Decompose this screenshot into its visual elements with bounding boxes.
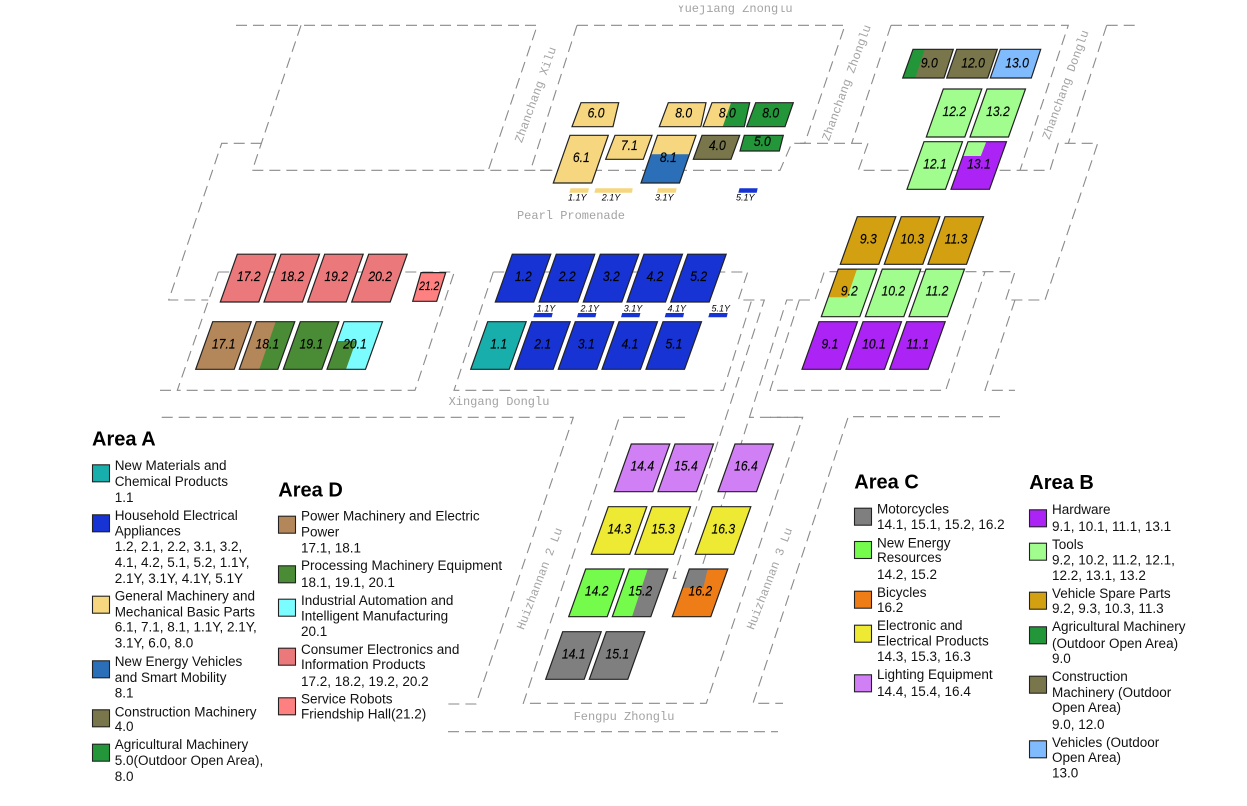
- hall 6.0: [572, 103, 619, 127]
- hall 16.2: [672, 569, 728, 617]
- legend item: Electronic and Electrical Products: 14.3, 15.3, 16.3: [877, 649, 971, 664]
- road label: Zhanchang Xilu: Zhanchang Xilu: [512, 45, 560, 145]
- hall 16.2: 16.2: [688, 583, 712, 599]
- legend item: Electronic and Electrical Products: Electronic and: [877, 618, 963, 633]
- strip 1.1Y: 1.1Y: [537, 304, 556, 314]
- hall 14.1: 14.1: [562, 646, 586, 661]
- hall 20.1: [327, 322, 382, 369]
- hall 14.3: [591, 507, 647, 554]
- legend item: Household Electrical Appliances: 1.2, 2.1, 2.2, 3.1, 3.2,: [115, 539, 242, 554]
- legend item: New Materials: [92, 458, 228, 505]
- hall 20.2: [352, 254, 407, 302]
- legend item: Vehicles outdoor: Open Area): [1052, 750, 1121, 765]
- hall 14.1: [546, 632, 601, 679]
- legend item: Consumer Electronics: Consumer Electronics and: [301, 642, 459, 657]
- hall 14.3: 14.3: [608, 521, 632, 536]
- legend item: New Energy Vehicles: New Energy Vehicles: [115, 654, 243, 669]
- hall 10.1: 10.1: [862, 336, 886, 351]
- strip 5.1Y: [708, 304, 731, 317]
- legend item: Power Machinery: 17.1, 18.1: [301, 540, 361, 555]
- hall 1.2: 1.2: [515, 268, 532, 284]
- hall 5.0: [740, 133, 783, 151]
- hall 2.1: 2.1: [533, 336, 551, 351]
- hall 5.1: [646, 322, 702, 369]
- strip 2.1Y top: 2.1Y: [601, 193, 621, 203]
- strip 3.1Y: [621, 304, 643, 317]
- legend item: Lighting Equipment: 14.4, 15.4, 16.4: [877, 684, 971, 699]
- hall 8.1: 8.1: [660, 149, 677, 165]
- hall 5.2: 5.2: [690, 268, 707, 284]
- hall 15.3: 15.3: [651, 521, 676, 536]
- hall 19.2: 19.2: [324, 268, 348, 284]
- hall 9.0: [903, 49, 953, 78]
- legend item: New Energy Resources: 14.2, 15.2: [877, 567, 937, 582]
- legend item: Household Electrical Appliances: [92, 508, 250, 586]
- legend item: Motorcycles: Motorcycles: [877, 501, 949, 516]
- legend item: Motorcycles: 14.1, 15.1, 15.2, 16.2: [877, 517, 1005, 532]
- legend item: General Machinery: [92, 589, 257, 651]
- strip 5.1Y: 5.1Y: [711, 304, 731, 314]
- legend item: Lighting Equipment: Lighting Equipment: [877, 667, 993, 682]
- strip 1.1Y: [533, 304, 556, 317]
- heading: Area B: Area B: [1029, 472, 1094, 494]
- legend item: General Machinery: General Machinery and: [115, 589, 255, 604]
- hall 19.2: [308, 254, 363, 302]
- legend item: Vehicle Spare Parts: Vehicle Spare Parts: [1052, 586, 1171, 601]
- legend item: Electronic and Electrical Products: Electrical Products: [877, 634, 989, 649]
- legend item: New Energy Vehicles: [92, 654, 243, 701]
- hall 8.0 general machinery: [659, 103, 706, 127]
- legend item: Construction Machinery: 4.0: [115, 719, 133, 734]
- legend item: New Energy Vehicles: 8.1: [115, 686, 133, 701]
- legend item: Agricultural Machinery: 5.0(Outdoor Open Area),: [115, 753, 263, 768]
- hall 20.2: 20.2: [367, 268, 392, 284]
- legend item: Power Machinery: Power: [301, 525, 340, 540]
- hall 8.0 mixed: 8.0: [719, 105, 737, 121]
- hall 19.1: [283, 322, 339, 369]
- hall 15.2: 15.2: [628, 583, 652, 599]
- hall 15.2: [612, 569, 668, 617]
- legend item: New Materials: Chemical Products: [115, 474, 228, 489]
- strip 2.1Y top: [594, 188, 633, 203]
- hall 4.2: 4.2: [647, 268, 663, 284]
- hall 3.2: [583, 254, 639, 302]
- hall 9.0: 9.0: [921, 55, 939, 70]
- hall 9.2: 9.2: [841, 283, 858, 299]
- hall 19.1: 19.1: [299, 336, 323, 351]
- road label: Pearl Promenade: Pearl Promenade: [517, 209, 625, 223]
- hall 6.1: [553, 135, 608, 183]
- legend item: Service Robots: Service Robots: [301, 692, 393, 707]
- legend item: Power Machinery: Power Machinery and Electric: [301, 509, 480, 524]
- legend item: Industrial Automation: [278, 593, 453, 639]
- road label: Huizhannan 3 Lu: Huizhannan 3 Lu: [744, 526, 796, 632]
- legend item: Household Electrical Appliances: 4.1, 4.2, 5.1, 5.2, 1.1Y,: [115, 555, 250, 570]
- hall 11.2: 11.2: [926, 283, 948, 299]
- hall 10.1: [846, 322, 902, 369]
- hall 15.3: [635, 507, 690, 554]
- hall 6.0: 6.0: [588, 105, 605, 121]
- hall 16.4: 16.4: [734, 458, 758, 474]
- legend item: Construction Machinery outdoor: 9.0, 12.0: [1052, 717, 1105, 732]
- hall 1.1: [471, 322, 526, 369]
- legend item: New Energy Resources: New Energy: [877, 535, 951, 550]
- legend item: Industrial Automation: 20.1: [301, 624, 327, 639]
- legend item: Construction Machinery: [92, 704, 257, 734]
- road label: Xingang Donglu: Xingang Donglu: [449, 395, 549, 409]
- legend item: Consumer Electronics: [278, 642, 459, 689]
- legend item: Industrial Automation: Intelligent Manufacturing: [301, 608, 448, 623]
- road label: Fengpu Zhonglu: Fengpu Zhonglu: [574, 710, 674, 724]
- legend: Area A: [92, 429, 263, 784]
- hall 12.0: 12.0: [961, 55, 986, 70]
- hall 4.2: [627, 254, 682, 302]
- hall 3.2: 3.2: [603, 268, 620, 284]
- strip 4.1Y: [665, 304, 687, 317]
- legend item: Construction Machinery outdoor: Construction: [1052, 669, 1128, 684]
- legend item: New Materials: New Materials and: [115, 458, 226, 473]
- hall 15.1: [589, 632, 645, 679]
- strip 3.1Y: 3.1Y: [624, 304, 643, 314]
- legend item: Electronic and Electrical Products: [854, 618, 989, 664]
- strip 5.1Y top: 5.1Y: [736, 193, 756, 203]
- legend item: Hardware: [1030, 502, 1171, 534]
- legend item: Construction Machinery outdoor: [1030, 669, 1172, 732]
- hall 4.0: [693, 135, 740, 159]
- legend item: Vehicle Spare Parts: [1030, 586, 1171, 616]
- strip 1.1Y top: [568, 188, 589, 203]
- hall 18.2: 18.2: [281, 268, 304, 284]
- legend item: Industrial Automation: Industrial Automation and: [301, 593, 453, 608]
- legend item: New Materials: 1.1: [115, 490, 133, 505]
- hall 8.1: [641, 135, 696, 183]
- hall 16.3: [695, 507, 751, 554]
- legend item: Agricultural Machinery: Agricultural Machinery: [115, 737, 248, 752]
- legend item: Household Electrical Appliances: 2.1Y, 3.1Y, 4.1Y, 5.1Y: [115, 571, 243, 586]
- hall 18.2: [264, 254, 320, 302]
- legend item: Lighting Equipment: [854, 667, 993, 699]
- legend item: General Machinery: 3.1Y, 6.0, 8.0: [115, 636, 193, 651]
- hall 7.1: [606, 135, 652, 159]
- legend item: Vehicle Spare Parts: 9.2, 9.3, 10.3, 11.3: [1052, 601, 1164, 616]
- strip 4.1Y: 4.1Y: [667, 304, 687, 314]
- hall 5.2: [671, 254, 726, 302]
- hall 8.0 general machinery: 8.0: [675, 105, 693, 121]
- legend item: Bicycles: Bicycles: [877, 585, 927, 600]
- legend item: Tools: [1030, 537, 1175, 583]
- legend item: Agricultural Machinery outdoor: Agricultural Machinery: [1052, 619, 1186, 634]
- road label: Zhanchang Zhonglu: Zhanchang Zhonglu: [820, 23, 875, 143]
- legend item: Agricultural Machinery: [92, 737, 263, 784]
- hall 10.2: [865, 269, 921, 317]
- hall 17.2: [220, 254, 276, 302]
- hall 12.0: [947, 49, 997, 78]
- legend item: General Machinery: 6.1, 7.1, 8.1, 1.1Y, 2.1Y,: [115, 620, 257, 635]
- legend item: Motorcycles: [854, 501, 1005, 532]
- strip 5.1Y top: [736, 188, 758, 203]
- hall 5.1: 5.1: [666, 336, 682, 351]
- legend item: Tools: Tools: [1052, 537, 1084, 552]
- hall 7.1: 7.1: [621, 137, 638, 153]
- hall 12.2: [926, 89, 982, 137]
- legend: Area C: [854, 471, 1005, 699]
- legend item: Consumer Electronics: 17.2, 18.2, 19.2, 20.2: [301, 674, 429, 689]
- legend item: Consumer Electronics: Information Products: [301, 657, 426, 672]
- heading: Area D: Area D: [278, 480, 343, 502]
- hall 9.2: [821, 269, 877, 317]
- hall 9.3: [840, 217, 896, 264]
- hall 5.0: 5.0: [754, 133, 772, 149]
- heading: Area C: Area C: [854, 471, 919, 493]
- hall 16.4: [718, 444, 774, 492]
- hall 8.0 agricultural: 8.0: [762, 105, 780, 121]
- hall 18.1: [239, 322, 295, 369]
- legend item: Bicycles: 16.2: [877, 600, 903, 615]
- hall 9.3: 9.3: [860, 231, 878, 246]
- legend item: Processing Machinery: Processing Machinery Equipment: [301, 558, 502, 573]
- legend item: Tools: 12.2, 13.1, 13.2: [1052, 568, 1146, 583]
- legend item: Agricultural Machinery outdoor: 9.0: [1052, 651, 1071, 666]
- hall 18.1: 18.1: [255, 336, 279, 351]
- hall 4.1: [602, 322, 658, 369]
- legend item: Processing Machinery: [278, 558, 502, 590]
- road label: Zhanchang Donglu: Zhanchang Donglu: [1040, 28, 1092, 142]
- legend item: Agricultural Machinery: 8.0: [115, 769, 133, 784]
- hall 14.2: 14.2: [585, 583, 609, 599]
- hall 9.1: [802, 322, 858, 369]
- hall 17.1: 17.1: [212, 336, 236, 351]
- hall 8.0 mixed: [703, 103, 750, 127]
- hall 8.0 agricultural: [747, 103, 793, 127]
- hall 1.2: [495, 254, 551, 302]
- hall 11.1: 11.1: [906, 336, 929, 351]
- hall 15.1: 15.1: [605, 646, 629, 661]
- legend item: New Energy Resources: [854, 535, 951, 582]
- legend item: Hardware: 9.1, 10.1, 11.1, 13.1: [1052, 519, 1171, 534]
- hall 12.1: 12.1: [923, 156, 947, 171]
- hall 2.2: [539, 254, 595, 302]
- hall 3.1: [558, 322, 614, 369]
- road label: Huizhannan 2 Lu: Huizhannan 2 Lu: [514, 526, 566, 632]
- hall 10.3: 10.3: [901, 231, 925, 246]
- hall 2.2: 2.2: [558, 268, 576, 284]
- hall 13.1: [951, 142, 1006, 189]
- hall 15.4: 15.4: [674, 458, 698, 474]
- hall 12.1: [907, 142, 962, 189]
- hall 13.0: 13.0: [1005, 55, 1030, 70]
- hall 2.1: [515, 322, 570, 369]
- legend item: Bicycles: [854, 585, 927, 615]
- hall 10.2: 10.2: [881, 283, 905, 299]
- strip 1.1Y top: 1.1Y: [568, 193, 588, 203]
- hall 1.1: 1.1: [490, 336, 507, 351]
- hall 21.2: [413, 273, 446, 301]
- hall 12.2: 12.2: [942, 103, 966, 119]
- hall 11.3: 11.3: [945, 231, 968, 246]
- legend item: Hardware: Hardware: [1052, 502, 1111, 517]
- legend item: Power Machinery: [278, 509, 480, 555]
- legend item: Agricultural Machinery outdoor: [1030, 619, 1186, 666]
- legend item: Service Robots: [278, 692, 426, 722]
- legend item: Construction Machinery: Construction Machinery: [115, 704, 257, 719]
- road network dashed lines: [160, 25, 1138, 732]
- hall 10.3: [884, 217, 940, 264]
- road label: Yuejiang Zhonglu: Yuejiang Zhonglu: [677, 2, 793, 16]
- legend item: Construction Machinery outdoor: Open Area): [1052, 700, 1121, 715]
- legend item: Processing Machinery: 18.1, 19.1, 20.1: [301, 575, 395, 590]
- hall 13.2: 13.2: [986, 103, 1010, 119]
- hall 21.2: 21.2: [418, 281, 439, 293]
- hall 17.1: [196, 322, 251, 369]
- legend item: Tools: 9.2, 10.2, 11.2, 12.1,: [1052, 552, 1175, 567]
- hall 11.3: [928, 217, 984, 264]
- legend item: Vehicles outdoor: Vehicles (Outdoor: [1052, 735, 1160, 750]
- hall 4.1: 4.1: [622, 336, 638, 351]
- legend item: General Machinery: Mechanical Basic Parts: [115, 604, 255, 620]
- legend item: New Energy Vehicles: and Smart Mobility: [115, 670, 227, 685]
- hall 9.1: 9.1: [822, 336, 838, 351]
- hall 15.4: [658, 444, 714, 492]
- legend item: Construction Machinery outdoor: Machinery (Outdoor: [1052, 685, 1172, 700]
- legend item: New Energy Resources: Resources: [877, 550, 942, 565]
- hall 13.0: [990, 49, 1041, 78]
- hall 13.2: [970, 89, 1026, 137]
- hall 13.1: 13.1: [967, 156, 991, 171]
- legend item: Service Robots: Friendship Hall(21.2): [301, 707, 426, 722]
- hall 11.1: [890, 322, 945, 369]
- hall 14.2: [569, 569, 624, 617]
- heading: Area A: Area A: [92, 429, 156, 451]
- hall 3.1: 3.1: [578, 336, 595, 351]
- hall 16.3: 16.3: [712, 521, 736, 536]
- legend item: Household Electrical Appliances: Household Electrical: [115, 508, 238, 523]
- legend item: Agricultural Machinery outdoor: (Outdoor Open Area): [1052, 636, 1178, 651]
- hall 14.4: [614, 444, 670, 492]
- legend item: Household Electrical Appliances: Appliances: [115, 524, 181, 538]
- legend item: Vehicles outdoor: [1030, 735, 1160, 781]
- strip 3.1Y top: [655, 188, 677, 203]
- hall 4.0: 4.0: [709, 137, 727, 153]
- strip 2.1Y: 2.1Y: [579, 304, 600, 314]
- hall 20.1: 20.1: [342, 336, 367, 351]
- hall 14.4: 14.4: [630, 458, 654, 474]
- legend: Area D: [278, 480, 502, 722]
- legend: Area B: [1029, 472, 1186, 781]
- hall 11.2: [909, 269, 964, 317]
- hall 17.2: 17.2: [237, 268, 261, 284]
- legend item: Vehicles outdoor: 13.0: [1052, 766, 1078, 781]
- hall 6.1: 6.1: [573, 149, 590, 165]
- strip 3.1Y top: 3.1Y: [655, 193, 675, 203]
- strip 2.1Y: [577, 304, 600, 317]
